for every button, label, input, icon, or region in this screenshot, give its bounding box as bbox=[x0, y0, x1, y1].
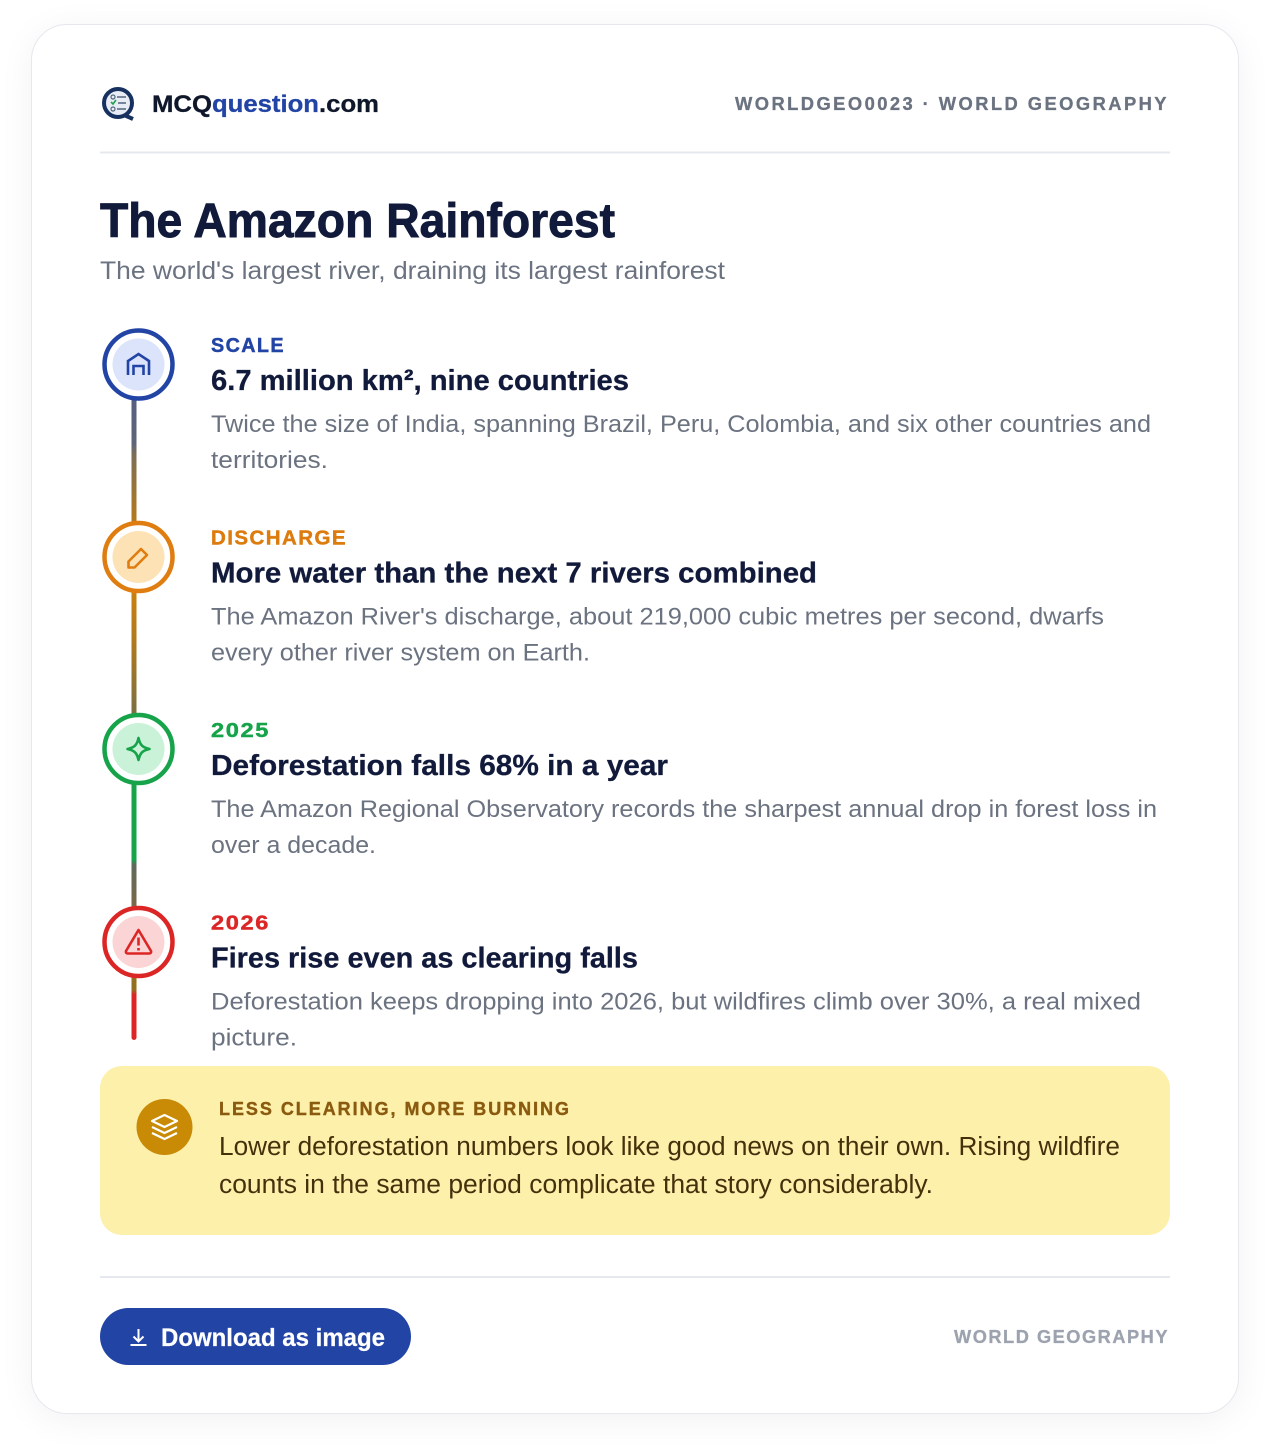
timeline connector 2 bbox=[132, 590, 136, 716]
description: over a decade. bbox=[211, 832, 376, 859]
heading: 6.7 million km², nine countries bbox=[211, 365, 629, 397]
callout text bbox=[219, 1133, 1120, 1199]
callout label: LESS CLEARING, MORE BURNING bbox=[219, 1099, 571, 1119]
timeline item: 2025 bbox=[104, 715, 1157, 859]
description: The Amazon Regional Observatory records the sharpest annual drop in forest loss in bbox=[211, 796, 1157, 823]
heading: Fires rise even as clearing falls bbox=[211, 942, 638, 974]
label: 2025 bbox=[211, 720, 270, 742]
icon: pencil bbox=[104, 523, 172, 591]
label: SCALE bbox=[211, 335, 285, 357]
icon: house bbox=[104, 330, 172, 398]
footer category: WORLD GEOGRAPHY bbox=[954, 1327, 1169, 1347]
button label: Download as image bbox=[161, 1324, 385, 1352]
description: picture. bbox=[211, 1024, 297, 1052]
callout bbox=[100, 1066, 1170, 1235]
title: The Amazon Rainforest bbox=[100, 195, 615, 248]
description bbox=[211, 411, 1151, 474]
label: DISCHARGE bbox=[211, 528, 347, 550]
timeline connector 4 bbox=[132, 975, 136, 1040]
description: territories. bbox=[211, 447, 328, 474]
callout text: Lower deforestation numbers look like good news on their own. Rising wildfire bbox=[219, 1133, 1120, 1161]
callout text: counts in the same period complicate that story considerably. bbox=[219, 1171, 933, 1199]
icon: warning triangle bbox=[104, 908, 172, 976]
timeline connector 3 bbox=[132, 783, 136, 909]
icon: download bbox=[130, 1329, 146, 1345]
description: The Amazon River's discharge, about 219,000 cubic metres per second, dwarfs bbox=[211, 604, 1104, 630]
icon: layers bbox=[136, 1099, 192, 1155]
question code and category: WORLDGEO0023 · WORLD GEOGRAPHY bbox=[735, 94, 1169, 114]
download button bbox=[100, 1308, 411, 1365]
description: every other river system on Earth. bbox=[211, 640, 590, 666]
header bbox=[104, 89, 1169, 119]
description: Deforestation keeps dropping into 2026, but wildfires climb over 30%, a real mixed bbox=[211, 988, 1141, 1016]
timeline item: discharge bbox=[104, 523, 1104, 666]
heading: More water than the next 7 rivers combined bbox=[211, 558, 817, 590]
description: Twice the size of India, spanning Brazil, Peru, Colombia, and six other countries and bbox=[211, 411, 1151, 438]
subtitle: The world's largest river, draining its largest rainforest bbox=[100, 257, 725, 285]
timeline connector 1 bbox=[132, 398, 136, 524]
label: 2026 bbox=[211, 912, 270, 934]
description bbox=[211, 796, 1157, 859]
heading: Deforestation falls 68% in a year bbox=[211, 750, 668, 782]
timeline item: 2026 bbox=[104, 908, 1141, 1052]
description bbox=[211, 988, 1141, 1052]
icon: MCQ logo bbox=[104, 89, 133, 119]
timeline item: scale bbox=[104, 330, 1151, 474]
icon: sparkle bbox=[104, 715, 172, 783]
brand name: MCQquestion.com bbox=[152, 91, 379, 118]
description bbox=[211, 604, 1104, 666]
